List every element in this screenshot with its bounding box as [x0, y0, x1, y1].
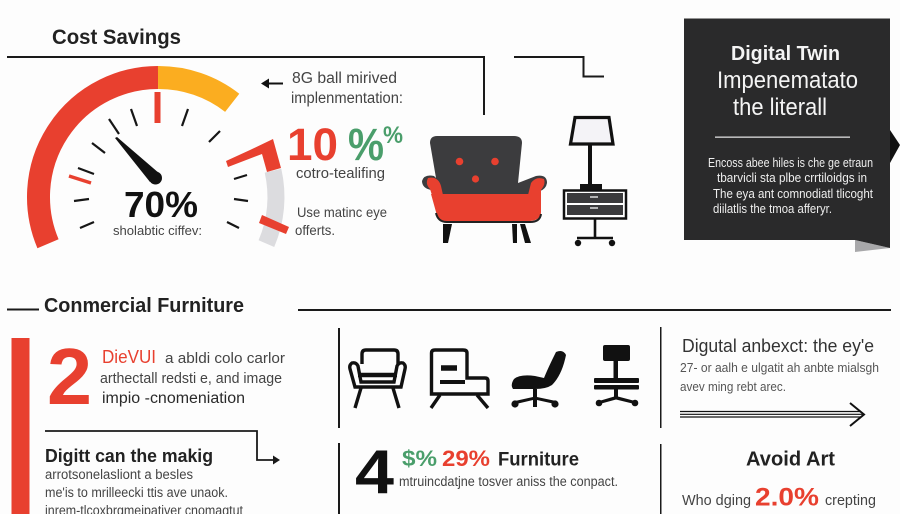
- armchair seat: [431, 194, 541, 221]
- icon: square armchair: [431, 350, 488, 408]
- lamp base: [580, 184, 602, 190]
- stat: 10 percent: %: [383, 122, 403, 149]
- table handles: [590, 197, 598, 208]
- section rule right: [298, 309, 891, 311]
- stat number 4: 4: [355, 438, 395, 507]
- heading: cost savings: Cost Savings: [52, 26, 181, 49]
- icon: task chair: [511, 351, 566, 408]
- panel title: Digital Twin: [731, 43, 840, 65]
- icon: lounge chair: [350, 350, 405, 408]
- panel corner: [855, 240, 890, 248]
- panel body: diilatlis the tmoa afferyr.: [713, 202, 832, 216]
- panel side arrow: [890, 130, 900, 163]
- table left wheel: [575, 240, 581, 246]
- digital text block: 27- or aalh e ulgatit ah anbte mialsgh: [680, 360, 879, 375]
- gauge red flag marker: [226, 139, 281, 172]
- icon: armchair: [422, 136, 547, 243]
- gauge caption: sholabtic ciffev:: [113, 223, 202, 238]
- gauge orange arc: [158, 77, 232, 103]
- gauge red arc: [38, 77, 158, 244]
- avoid art stat line: crepting: [825, 492, 876, 509]
- heading: commercial furniture: Conmercial Furniture: [44, 295, 244, 317]
- gauge chart: [38, 77, 289, 244]
- stat caption: cotro-tealifing: [296, 166, 385, 182]
- stat 4 heading: $%: [402, 446, 437, 471]
- gauge red lower marker: [259, 215, 289, 234]
- gauge value: 70%: [124, 184, 198, 225]
- connector line: lamp bracket: [514, 57, 604, 76]
- armchair left arm: [427, 178, 443, 195]
- panel subtitle: the literall: [733, 94, 827, 121]
- panel divider: [715, 136, 850, 138]
- column dividers: [338, 327, 662, 514]
- stat 2 description: a abldi colo carlor: [165, 350, 285, 367]
- gauge ticks: [74, 109, 248, 228]
- armchair buttons: [456, 158, 499, 183]
- section rule left: [7, 308, 39, 310]
- usage note: offerts.: [295, 222, 335, 238]
- gauge needle: [115, 137, 162, 184]
- stat 4 description: mtruincdatjne tosver aniss the conpact.: [399, 474, 618, 489]
- panel body: The eya ant comnodiatl tlicoght: [713, 187, 873, 201]
- stat 2 description: impio -cnomeniation: [102, 390, 245, 407]
- table stand: [577, 219, 613, 238]
- panel body: Encoss abee hiles is che ge etraun: [708, 156, 873, 170]
- table right wheel: [609, 240, 615, 246]
- avoid art stat line: Who dging: [682, 492, 751, 509]
- subheading: Digitt can the makig: [45, 446, 213, 466]
- avoid art stat line: 2.0%: [755, 484, 819, 512]
- digital text block: Digutal anbexct: the ey'e: [682, 336, 874, 356]
- digital text block: avev ming rebt arec.: [680, 379, 786, 394]
- stat 2 description: DieVUI: [102, 347, 156, 367]
- arrow: pointing to note: [261, 78, 283, 88]
- panel fold: [855, 240, 890, 252]
- implementation note: implenmentation:: [291, 90, 403, 107]
- stat 4 heading: [402, 446, 579, 471]
- body text: arrotsonelasliont a besles: [45, 467, 193, 482]
- long double arrow: [680, 403, 864, 426]
- table drawer upper: [567, 193, 623, 203]
- armchair back: [422, 136, 547, 196]
- lamp shade: [570, 118, 613, 144]
- stat 2 description: [100, 347, 285, 407]
- side table: [564, 190, 626, 218]
- red side bar: [12, 338, 30, 514]
- stat 4 heading: 29%: [442, 446, 490, 471]
- connector line: top section rule: [7, 57, 484, 115]
- avoid art stat line: [682, 484, 876, 512]
- panel body: tbarvicli sta plbe crrtiloidgs in: [717, 171, 867, 185]
- panel background: [684, 18, 890, 240]
- gauge grey arc: [266, 171, 276, 244]
- armchair right arm: [528, 178, 545, 195]
- stat number 2: 2: [47, 332, 92, 421]
- panel subtitle: Impenematato: [717, 67, 858, 94]
- stat 4 heading: Furniture: [498, 450, 579, 470]
- usage note: Use matinc eye: [297, 204, 387, 220]
- body text: me'is to mrilleecki ttis ave unaok.: [45, 485, 228, 500]
- stat: 10 percent: %: [348, 119, 384, 170]
- stat: 10 percent: 10: [287, 119, 338, 170]
- implementation note: 8G ball mirived: [292, 70, 397, 87]
- table drawer lower: [567, 205, 623, 215]
- icon: lamp on side table: [564, 118, 626, 246]
- lamp stem: [588, 145, 592, 186]
- armchair legs: [443, 224, 531, 243]
- gauge red ticks: [69, 92, 158, 183]
- stat: 10 percent: [287, 119, 403, 170]
- stat 2 description: arthectall redsti e, and image: [100, 370, 282, 387]
- icon: stool chair: [594, 345, 639, 406]
- panel: digital twin: [684, 18, 900, 252]
- heading: avoid art: Avoid Art: [746, 448, 835, 470]
- connector arrow: [45, 431, 280, 464]
- digital text block: [680, 336, 879, 394]
- armchair seat shadow: [436, 213, 541, 222]
